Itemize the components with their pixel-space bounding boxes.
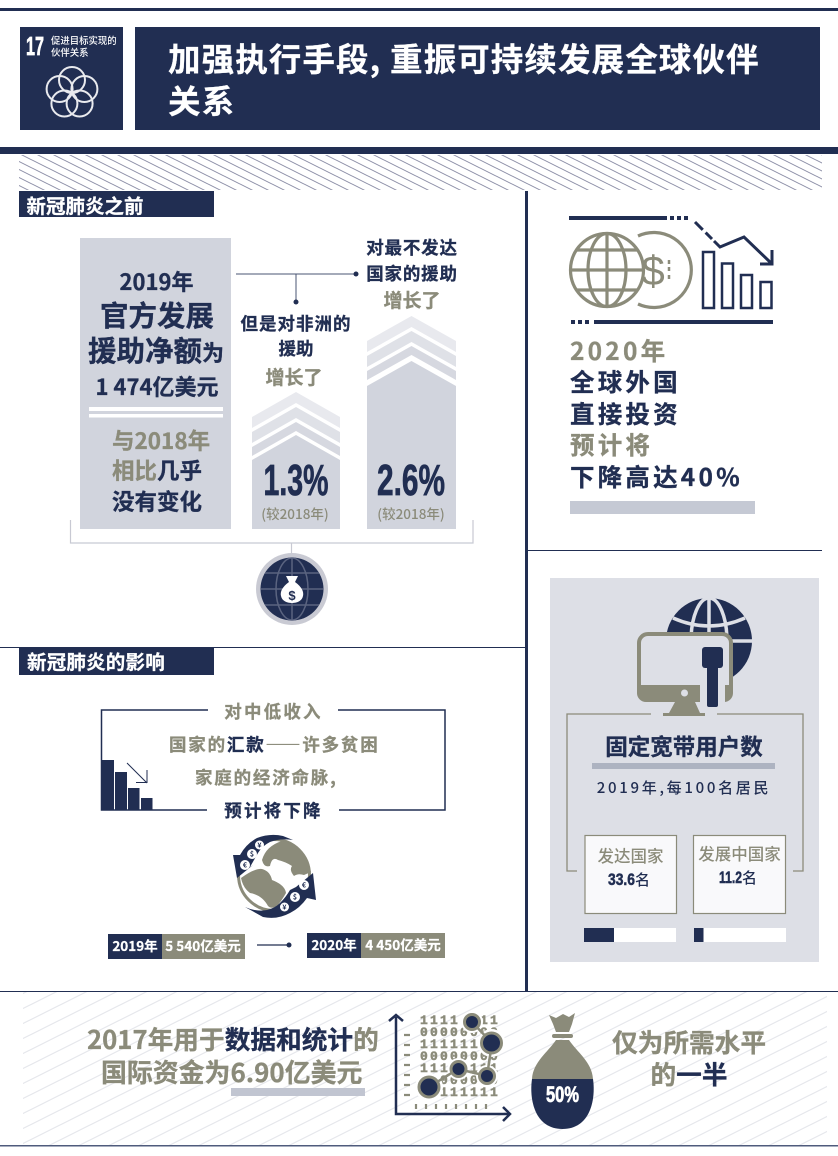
bar: developed share: [584, 928, 676, 942]
chart icon: binary data plot: 00000000: [420, 1025, 500, 1040]
label: least developed countries aid: 增长了: [383, 286, 441, 313]
label: remittances 2020: 2020年: [311, 934, 357, 954]
icon: globe with currency arrows: €: [302, 880, 307, 890]
bar: developing share: [694, 928, 786, 942]
chart: least developed countries growth arrow bar: 2.6%: [377, 456, 445, 505]
bracket: [70, 520, 473, 554]
card: developing countries: [694, 836, 786, 914]
title: 关系: [168, 76, 235, 123]
icon: falling bars: [101, 760, 152, 810]
card: developing countries: 11.2名: [719, 867, 757, 888]
panel: official development assistance: 没有变化: [112, 485, 202, 517]
panel: official development assistance: 与2018年: [112, 424, 210, 456]
panel: official development assistance: [80, 238, 231, 529]
icon: FDI globe, coin and falling chart: $: [641, 247, 665, 294]
arrow: 2019 to 2020: [257, 942, 292, 948]
card: developed countries: 发达国家: [598, 843, 664, 867]
text block: half of required level: [612, 1023, 766, 1092]
label: remittances 2020: [307, 933, 445, 958]
icon: globe with currency arrows: $: [293, 892, 297, 902]
label: aid to Africa: 援助: [278, 336, 314, 361]
text block: FDI forecast: 预计将: [570, 427, 653, 462]
icon: globe with currency arrows: [233, 835, 316, 918]
chart icon: binary data plot: 00000000: [420, 1049, 500, 1064]
label: remittances 2019: 5 540亿美元: [165, 935, 241, 955]
panel: official development assistance: 2019年: [120, 265, 193, 297]
heading: before COVID-19: 新冠肺炎之前: [26, 190, 144, 219]
label: aid to Africa: 增长了: [265, 363, 323, 390]
panel: remittances: [101, 699, 445, 823]
icon: globe with currency arrows: $: [250, 850, 254, 860]
text block: FDI forecast: 全球外国: [570, 364, 681, 399]
heading: impact of COVID-19: 新冠肺炎的影响: [27, 646, 165, 675]
card: developed countries: [585, 836, 676, 914]
icon: SDG 17 badge: [20, 27, 123, 130]
chart icon: binary data plot: 11111111: [420, 1061, 500, 1076]
panel: remittances: 预计将下降: [224, 798, 323, 823]
panel: fixed broadband: 固定宽带用户数: [605, 730, 763, 762]
label: least developed countries aid: 国家的援助: [366, 261, 458, 286]
label: least developed countries aid: 对最不发达: [366, 235, 458, 260]
icon: FDI globe, coin and falling chart: [569, 218, 773, 322]
label: aid to Africa: 但是对非洲的: [240, 311, 352, 336]
icon: SDG 17 badge: 伙伴关系: [51, 45, 89, 59]
panel: official development assistance: 1 474亿美元: [96, 370, 218, 402]
title: 加强执行手段,: [168, 34, 381, 81]
text block: FDI forecast: 下降高达40%: [570, 459, 743, 494]
icon: globe with currency arrows: ¥: [257, 840, 262, 850]
title: 重振可持续发展全球伙伴: [390, 34, 760, 81]
card: developing countries: 发展中国家: [698, 841, 781, 865]
label: remittances 2020: 4 450亿美元: [365, 934, 441, 954]
chart icon: binary data plot: 11111111: [420, 1037, 500, 1052]
panel: remittances: 家庭的经济命脉,: [195, 765, 338, 790]
panel: remittances: 国家的汇款——许多贫困: [169, 732, 380, 757]
chart: Africa growth arrow bar: [252, 392, 340, 529]
text block: data and statistics funding: 2017年用于数据和统计的: [87, 1020, 379, 1057]
text block: FDI forecast: 2020年: [570, 333, 668, 368]
label: aid to Africa: [240, 311, 352, 390]
text block: half of required level: 仅为所需水平: [612, 1023, 766, 1060]
label: remittances 2019: 2019年: [112, 935, 158, 955]
panel: remittances: 对中低收入: [224, 699, 323, 724]
icon: SDG 17 badge: 17: [26, 31, 44, 61]
chart icon: binary data plot: 1111: [420, 1013, 460, 1028]
text block: data and statistics funding: [87, 1020, 379, 1096]
card: developed countries: 33.6名: [608, 869, 650, 890]
chart icon: binary data plot: 11111111: [420, 1085, 500, 1100]
chart icon: binary data plot: [389, 1011, 510, 1121]
chart: least developed countries growth arrow bar: [367, 316, 456, 529]
chart: least developed countries growth arrow bar: (较2018年): [377, 503, 445, 523]
chart icon: binary data plot: 11: [480, 1013, 500, 1028]
panel: official development assistance: 援助净额为: [88, 329, 224, 370]
icon: globe and monitor with cable: [637, 596, 752, 716]
icon: money bag 50%: [531, 1013, 594, 1129]
panel: fixed broadband: [550, 578, 819, 962]
text block: data and statistics funding: 国际资金为6.90亿美元: [101, 1053, 362, 1090]
panel: official development assistance: 相比几乎: [112, 454, 202, 486]
icon: SDG 17 badge: 促进目标实现的: [51, 33, 117, 47]
chart: Africa growth arrow bar: 1.3%: [264, 456, 328, 505]
label: least developed countries aid: [366, 235, 458, 313]
icon: globe with currency arrows: ¥: [282, 902, 287, 912]
label: remittances 2019: [108, 934, 245, 959]
connector lines: [236, 272, 358, 304]
chart icon: binary data plot: 00000000: [420, 1073, 500, 1088]
text block: half of required level: 的一半: [650, 1055, 728, 1092]
panel: official development assistance: 官方发展: [100, 294, 214, 335]
panel: fixed broadband: 2019年,每100名居民: [597, 777, 771, 798]
chart: Africa growth arrow bar: (较2018年): [261, 503, 329, 523]
icon: globe with money bag: $: [288, 588, 296, 603]
icon: globe with money bag: [256, 553, 328, 625]
icon: globe with currency arrows: €: [243, 860, 248, 870]
icon: money bag 50%: 50%: [546, 1082, 579, 1107]
text block: FDI forecast: [570, 333, 755, 514]
text block: FDI forecast: 直接投资: [570, 396, 681, 431]
heading: before COVID-19: [19, 190, 214, 219]
title: [135, 27, 820, 130]
